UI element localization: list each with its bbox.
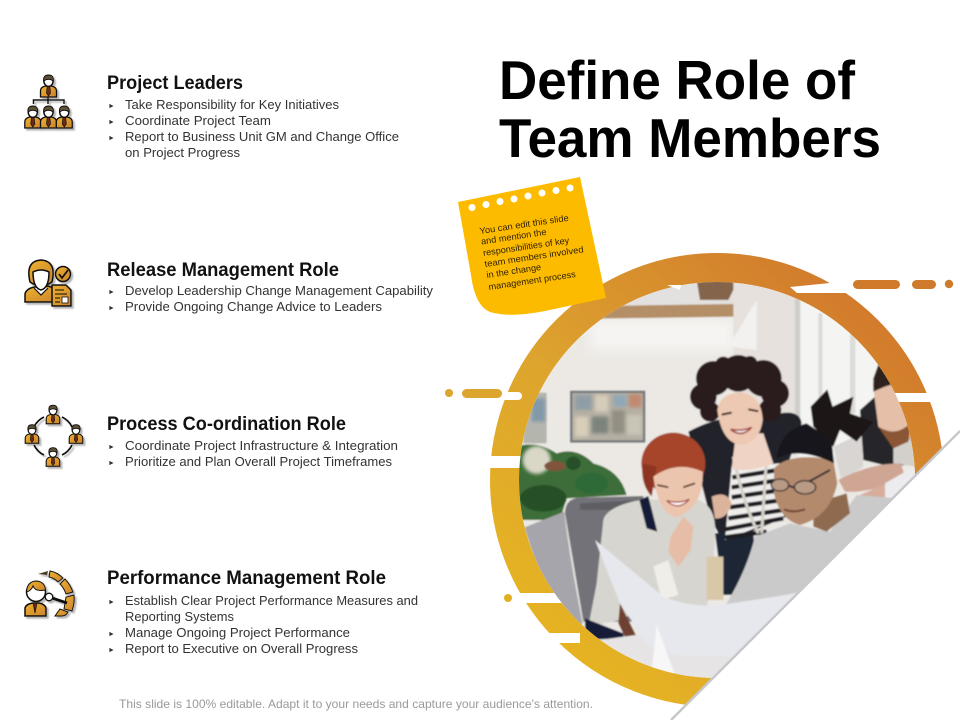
footer note: This slide is 100% editable. Adapt it to your needs and capture your audience's attention. (119, 697, 593, 711)
bullet list: performance management: Report to Executive on Overall Progress (125, 641, 358, 656)
icon: process coordination circle of people (25, 405, 83, 466)
paintings (523, 391, 645, 443)
sticky note text: responsibilities of key (482, 235, 570, 258)
wall and room (522, 282, 914, 658)
bullet list: project leaders: ► (108, 135, 115, 142)
man on the right (833, 364, 914, 498)
sticky note (458, 177, 606, 315)
bullet list: process coordination: ► (108, 444, 115, 451)
icon: release management person with document (25, 260, 71, 306)
bullet list: project leaders (108, 97, 399, 160)
small white notch at top of photo (667, 285, 681, 290)
heading: project leaders: Project Leaders (107, 73, 243, 94)
ring around the photo (480, 268, 960, 692)
bullet list: performance management: ► (108, 647, 115, 654)
bullet list: release management: Provide Ongoing Change Advice to Leaders (125, 299, 382, 314)
title (499, 49, 881, 169)
heading: release management: Release Management Role (107, 260, 339, 281)
bullet list: release management: ► (108, 305, 115, 312)
sticky note text: management process (488, 269, 577, 292)
bullet list: performance management (108, 593, 418, 656)
diagonal cut with grey edge (670, 430, 960, 720)
bullet list: project leaders: Coordinate Project Team (125, 113, 271, 128)
bullet list: process coordination: Prioritize and Plan Overall Project Timeframes (125, 454, 392, 469)
bullet list: process coordination (108, 438, 398, 469)
sticky note text (479, 213, 584, 292)
bullet list: release management: Develop Leadership Change Management Capability (125, 283, 434, 298)
title: Team Members (499, 107, 881, 169)
bullet list: process coordination: Coordinate Project Infrastructure & Integration (125, 438, 398, 453)
woman with red hair (585, 433, 715, 641)
panel: performance management role (107, 568, 418, 656)
photo of team around a document (519, 282, 915, 678)
bullet list: project leaders: on Project Progress (125, 145, 240, 160)
bullet list: project leaders: Report to Business Unit GM and Change Office (125, 129, 399, 144)
chair and laptop (524, 496, 643, 624)
bullet list: process coordination: ► (108, 460, 115, 467)
sticky note text: You can edit this slide (479, 213, 569, 236)
heading: performance management: Performance Management Role (107, 568, 386, 589)
sticky note text: in the change (486, 262, 542, 280)
decorative dot lower left (504, 594, 512, 602)
decorative dashes left (445, 389, 502, 398)
bullet list: performance management: ► (108, 631, 115, 638)
panel: release management role (107, 260, 434, 314)
document on the table (594, 540, 779, 673)
sticky note text: and mention the (480, 227, 547, 246)
title: Define Role of (499, 49, 856, 111)
heading: process coordination: Process Co-ordination Role (107, 414, 346, 435)
bullet list: performance management: ► (108, 599, 115, 606)
bullet list: performance management: Reporting Systems (125, 609, 234, 624)
bullet list: project leaders: Take Responsibility for Key Initiatives (125, 97, 339, 112)
bullet list: project leaders: ► (108, 103, 115, 110)
bullet list: release management (108, 283, 434, 314)
decorative dashes top right (853, 280, 953, 289)
bullet list: performance management: Manage Ongoing Project Performance (125, 625, 350, 640)
panel: project leaders (107, 73, 399, 160)
icon: project leaders hierarchy (25, 75, 72, 128)
bullet list: project leaders: ► (108, 119, 115, 126)
man with dreadlocks (720, 389, 897, 607)
bullet list: performance management: Establish Clear Project Performance Measures and (125, 593, 418, 608)
plant (517, 444, 627, 520)
sticky note text: team members involved (484, 244, 584, 269)
woman with curly hair (688, 355, 802, 595)
bullet list: release management: ► (108, 289, 115, 296)
icon: performance gauge and person (25, 571, 74, 616)
panel: process coordination role (107, 414, 398, 469)
